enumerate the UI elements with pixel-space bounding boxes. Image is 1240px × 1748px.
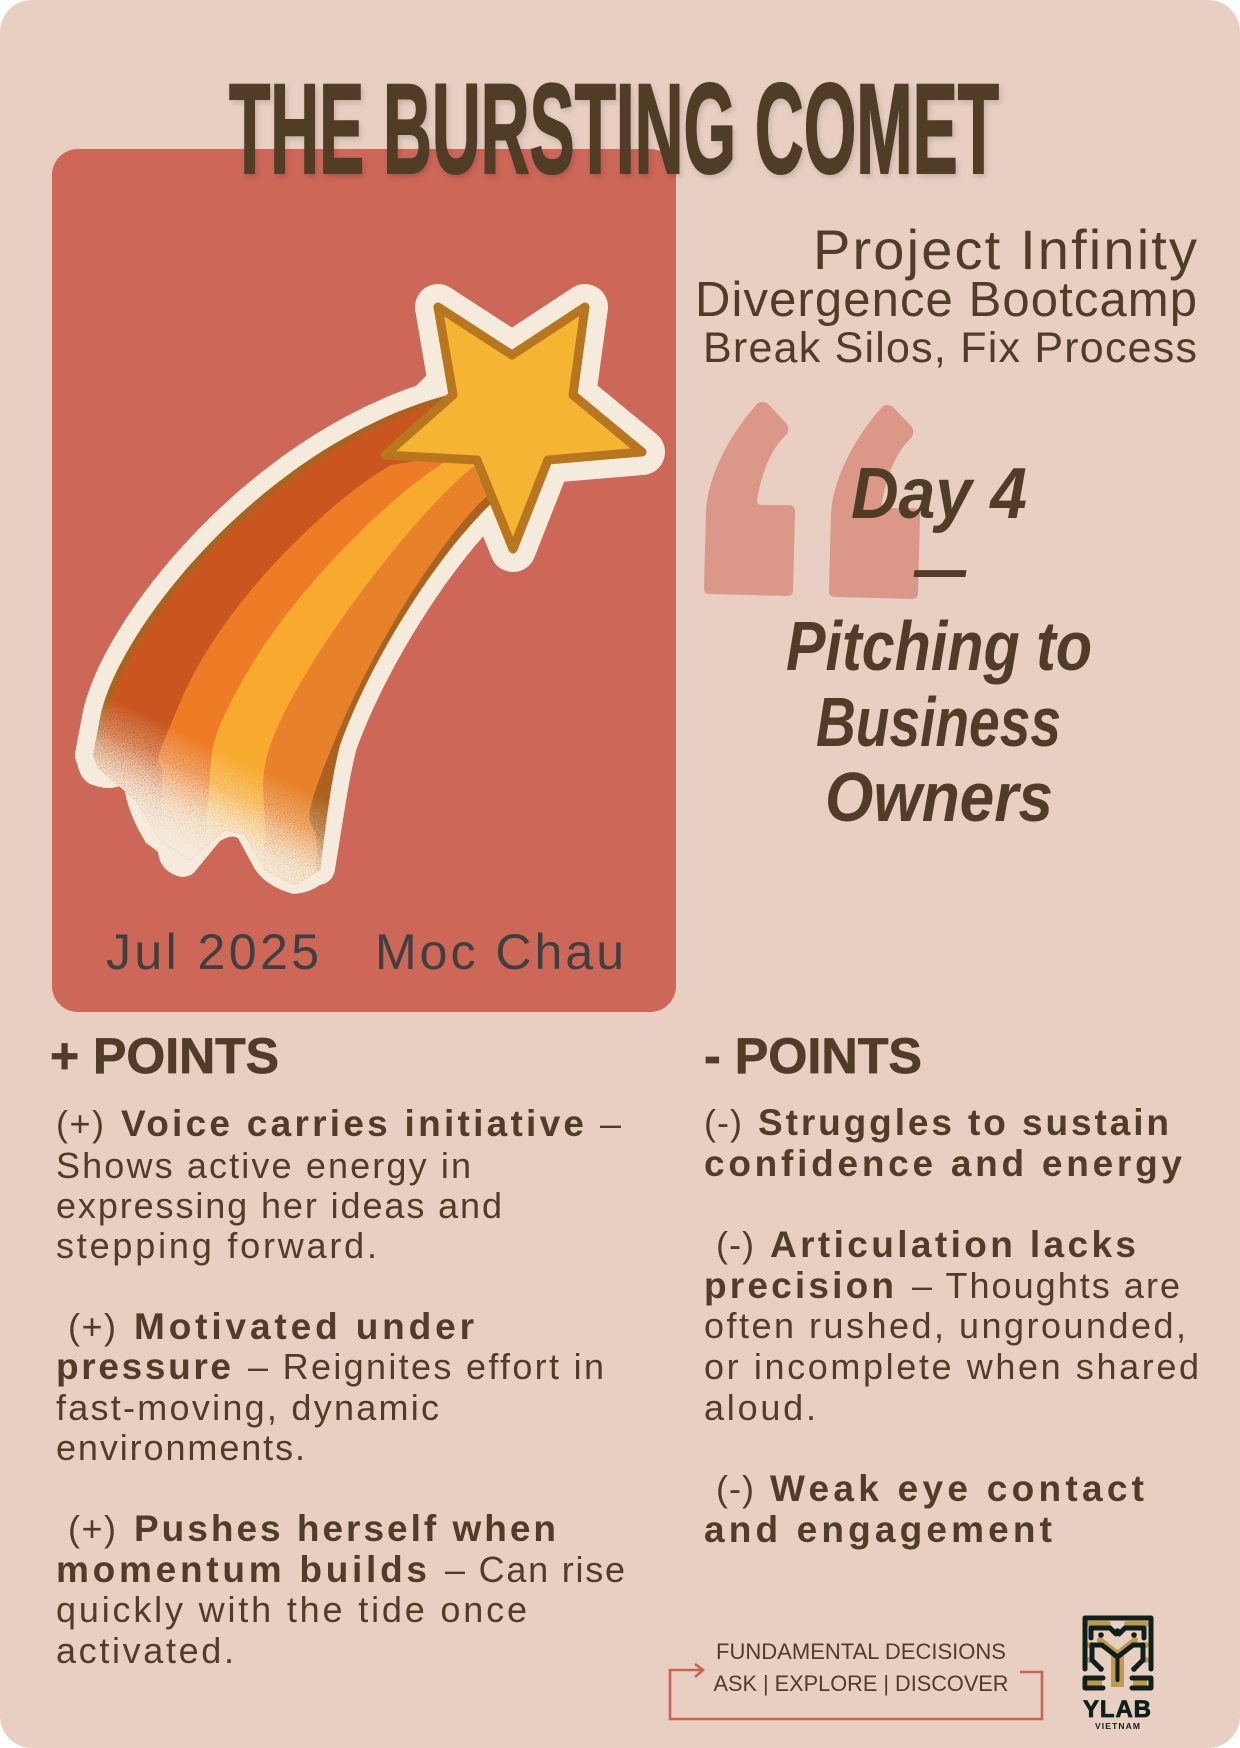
point: pushes herself: quickly with the tide once [56, 1589, 527, 1630]
date and place: Moc Chau [375, 924, 624, 980]
point: pushes herself: (+) [68, 1508, 116, 1549]
point: motivated under pressure: – Reignites effort in [248, 1346, 604, 1387]
project subtitle: Divergence Bootcamp [695, 273, 1197, 327]
point: voice carries initiative [56, 1103, 621, 1266]
day heading: Day 4 [851, 454, 1027, 534]
project subtitle [695, 218, 1197, 372]
icon: quotation marks [704, 402, 920, 599]
logo wordmark: YLAB [1083, 1696, 1151, 1723]
point: articulation lacks precision: (-) [716, 1224, 754, 1265]
point: articulation lacks precision: Articulation lacks [770, 1224, 1136, 1265]
point: struggles to sustain: (-) [704, 1102, 742, 1143]
point: articulation lacks precision: – Thoughts are [912, 1265, 1180, 1306]
point: articulation lacks precision: often rushed, ungrounded, [704, 1305, 1186, 1346]
point: articulation lacks precision: precision [704, 1265, 894, 1306]
point: pushes herself: momentum builds [56, 1549, 427, 1590]
comet sticker outline [76, 307, 642, 894]
point: voice carries initiative: expressing her ideas and [56, 1185, 502, 1226]
day heading [786, 454, 1092, 836]
point: struggles to sustain: Struggles to sustain [758, 1102, 1169, 1143]
day heading: — [913, 529, 967, 607]
point: pushes herself: Pushes herself when [134, 1508, 556, 1549]
day heading: Owners [825, 758, 1053, 836]
panel: comet card [52, 149, 676, 1012]
heading: plus points: + POINTS [50, 1028, 279, 1084]
point: voice carries initiative: stepping forward. [56, 1225, 377, 1266]
heading: minus points: - POINTS [704, 1028, 922, 1084]
footer: fundamental decisions tagline: FUNDAMENTAL DECISIONS [716, 1639, 1006, 1664]
footer: fundamental decisions tagline: ASK | EXPLORE | DISCOVER [714, 1671, 1008, 1696]
point: pushes herself: – Can rise [445, 1549, 625, 1590]
point: weak eye contact: and engagement [704, 1509, 1052, 1550]
comet tail bands [93, 396, 490, 885]
point: weak eye contact [704, 1468, 1144, 1550]
date and place: Jul 2025 [106, 924, 319, 980]
point: voice carries initiative: Voice carries initiative [121, 1103, 584, 1144]
day heading: Pitching to [786, 607, 1092, 685]
point: struggles to sustain: confidence and energy [704, 1143, 1182, 1184]
date and place [106, 924, 624, 980]
point: voice carries initiative: – [600, 1103, 621, 1144]
point: articulation lacks precision [704, 1224, 1199, 1428]
day heading: Business [816, 683, 1061, 761]
panel: plus points [50, 1028, 625, 1671]
point: voice carries initiative: (+) [56, 1103, 104, 1144]
logo mark [1085, 1618, 1151, 1688]
project subtitle: Project Infinity [813, 218, 1197, 281]
point: struggles to sustain [704, 1102, 1182, 1184]
point: motivated under pressure: pressure [56, 1346, 231, 1387]
point: voice carries initiative: Shows active energy in [56, 1145, 471, 1186]
point: weak eye contact: Weak eye contact [770, 1468, 1144, 1509]
point: pushes herself [56, 1508, 625, 1671]
project subtitle: Break Silos, Fix Process [703, 324, 1197, 372]
icon: shooting star comet [60, 307, 642, 900]
point: motivated under pressure [56, 1306, 604, 1468]
point: articulation lacks precision: or incomplete when shared [704, 1346, 1199, 1387]
arrow: feedback loop [670, 1664, 1042, 1719]
point: weak eye contact: (-) [716, 1468, 754, 1509]
tail dissolve [93, 700, 328, 885]
point: motivated under pressure: (+) [68, 1306, 116, 1347]
star [385, 307, 642, 549]
point: articulation lacks precision: aloud. [704, 1387, 816, 1428]
logo: YLAB Vietnam [1083, 1618, 1151, 1731]
point: pushes herself: activated. [56, 1630, 234, 1671]
point: motivated under pressure: fast-moving, dynamic [56, 1387, 439, 1428]
point: motivated under pressure: Motivated under [134, 1306, 474, 1347]
point: motivated under pressure: environments. [56, 1427, 305, 1468]
panel: minus points [704, 1028, 1199, 1550]
footer: fundamental decisions tagline [670, 1639, 1042, 1719]
logo: YLAB Vietnam: VIETNAM [1095, 1721, 1140, 1731]
